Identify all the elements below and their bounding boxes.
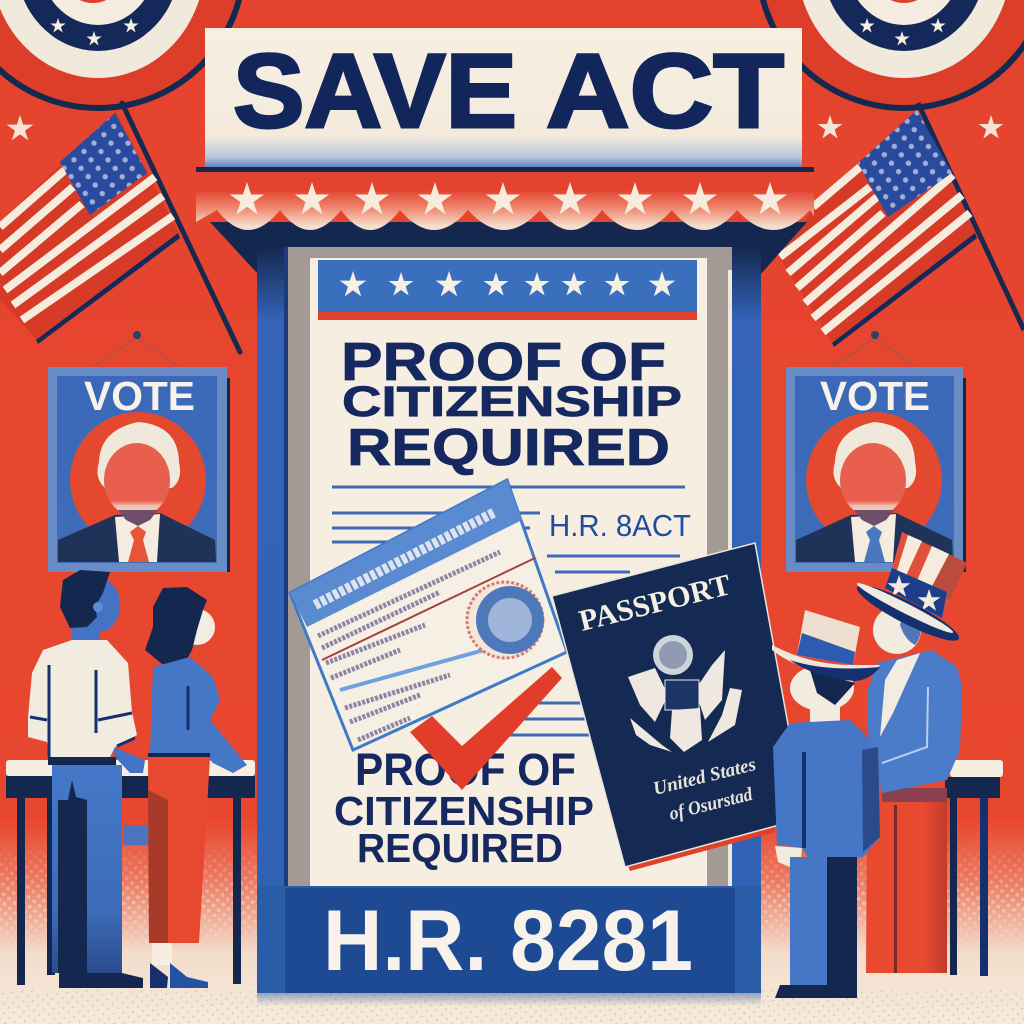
lower headline: PROOF OF bbox=[355, 744, 576, 795]
scalloped star awning bbox=[196, 167, 814, 230]
decorative wall stars bbox=[7, 115, 1003, 140]
passport bbox=[552, 543, 805, 871]
banner title: SAVE bbox=[233, 33, 517, 150]
bill number partial: H.R. 8ACT bbox=[549, 508, 691, 543]
lower headline: REQUIRED bbox=[357, 825, 563, 871]
upper headline: CITIZENSHIP bbox=[342, 378, 682, 426]
right bunting rosette bbox=[758, 0, 1024, 108]
person: man from behind bbox=[28, 570, 145, 988]
left table bbox=[6, 760, 255, 985]
banner title bbox=[205, 28, 802, 167]
bill number plate bbox=[257, 886, 761, 993]
voting booth frame bbox=[210, 222, 807, 990]
bill number plate: H.R. 8281 bbox=[323, 893, 693, 989]
central proof-of-citizenship poster bbox=[310, 258, 707, 886]
right table bbox=[945, 760, 1003, 976]
left bunting rosette bbox=[0, 0, 244, 108]
upper headline: REQUIRED bbox=[347, 419, 670, 477]
body text rules bbox=[332, 487, 685, 735]
passport footer bbox=[651, 754, 758, 825]
lower headline: CITIZENSHIP bbox=[334, 788, 594, 834]
person: uncle sam figure bbox=[852, 532, 967, 973]
poster label: VOTE bbox=[820, 373, 930, 419]
id card document bbox=[290, 480, 567, 750]
right american flag bbox=[780, 103, 1024, 347]
right vote poster bbox=[786, 331, 966, 572]
person: man in top hat from behind bbox=[772, 610, 880, 998]
upper headline bbox=[341, 332, 682, 477]
person: woman from behind bbox=[145, 587, 247, 988]
upper headline: PROOF OF bbox=[341, 332, 666, 392]
poster label: VOTE bbox=[84, 373, 195, 419]
red check mark bbox=[410, 667, 562, 790]
left american flag bbox=[0, 103, 240, 352]
passport footer: of Osurstad bbox=[667, 784, 755, 825]
passport footer: United States bbox=[651, 754, 758, 800]
banner title: ACT bbox=[546, 33, 784, 150]
icon: eagle seal bbox=[628, 635, 742, 752]
left vote poster bbox=[48, 331, 230, 572]
icon: star-spangled top hat bbox=[852, 532, 967, 649]
star band bbox=[318, 260, 697, 320]
lower headline bbox=[334, 744, 594, 871]
passport title: PASSPORT bbox=[576, 568, 734, 638]
